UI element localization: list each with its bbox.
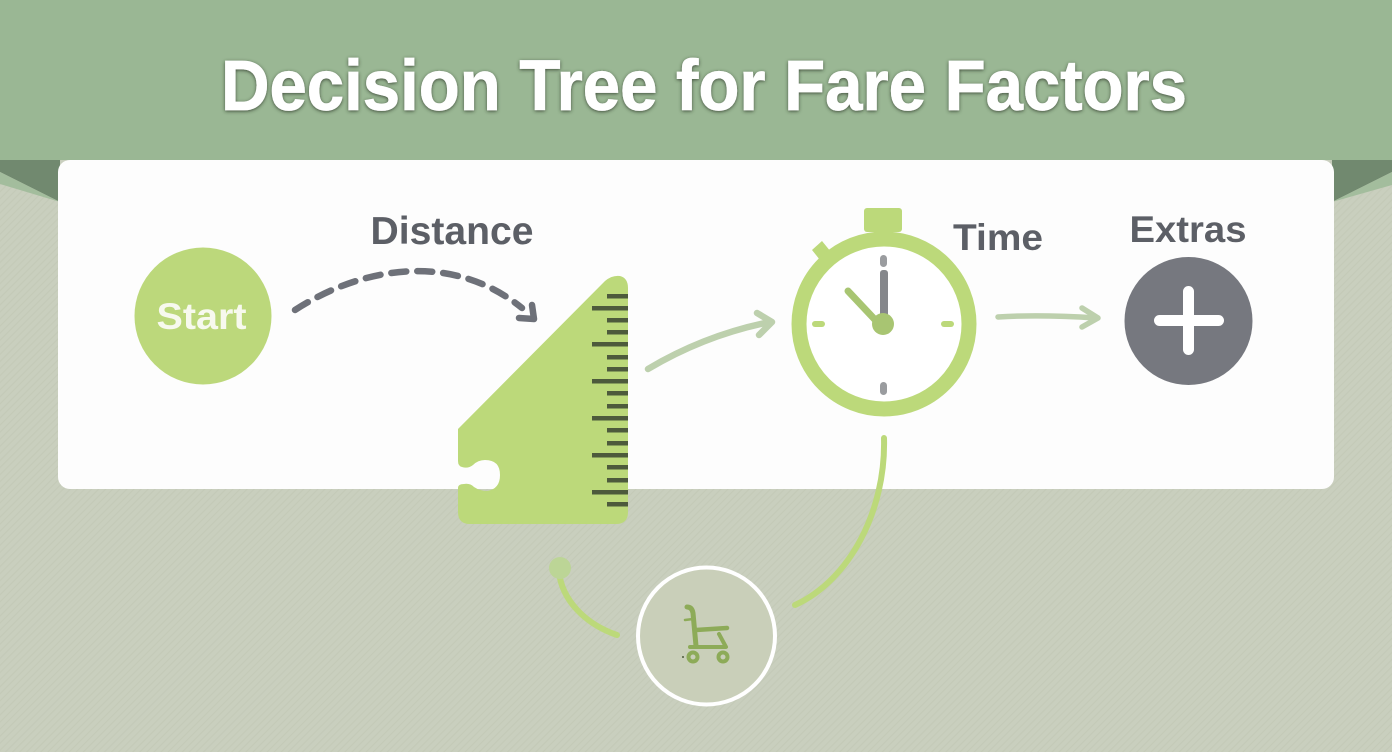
panel: flow card: [58, 160, 1334, 489]
arrow: time to extras: [998, 308, 1098, 327]
accessibility node: [638, 568, 775, 704]
connector: time to accessibility: [795, 438, 884, 605]
arrow: start to distance: [295, 271, 534, 319]
connector: accessibility to dot: [549, 557, 617, 635]
header band: [0, 0, 1392, 202]
icon: stopwatch: [799, 208, 969, 409]
extras label: Extras: [1130, 209, 1246, 250]
arrow: distance to time: [648, 313, 772, 369]
icon: wheelchair: [685, 607, 728, 662]
icon: extras plus: [1124, 257, 1252, 385]
start node: [134, 248, 272, 384]
icon: ruler: [458, 276, 628, 524]
wheelchair speck: [682, 656, 684, 658]
distance label: Distance: [370, 210, 534, 253]
time label: Time: [953, 217, 1043, 258]
title: Decision Tree for Fare Factors: [221, 47, 1187, 126]
start node: Start: [156, 296, 246, 337]
